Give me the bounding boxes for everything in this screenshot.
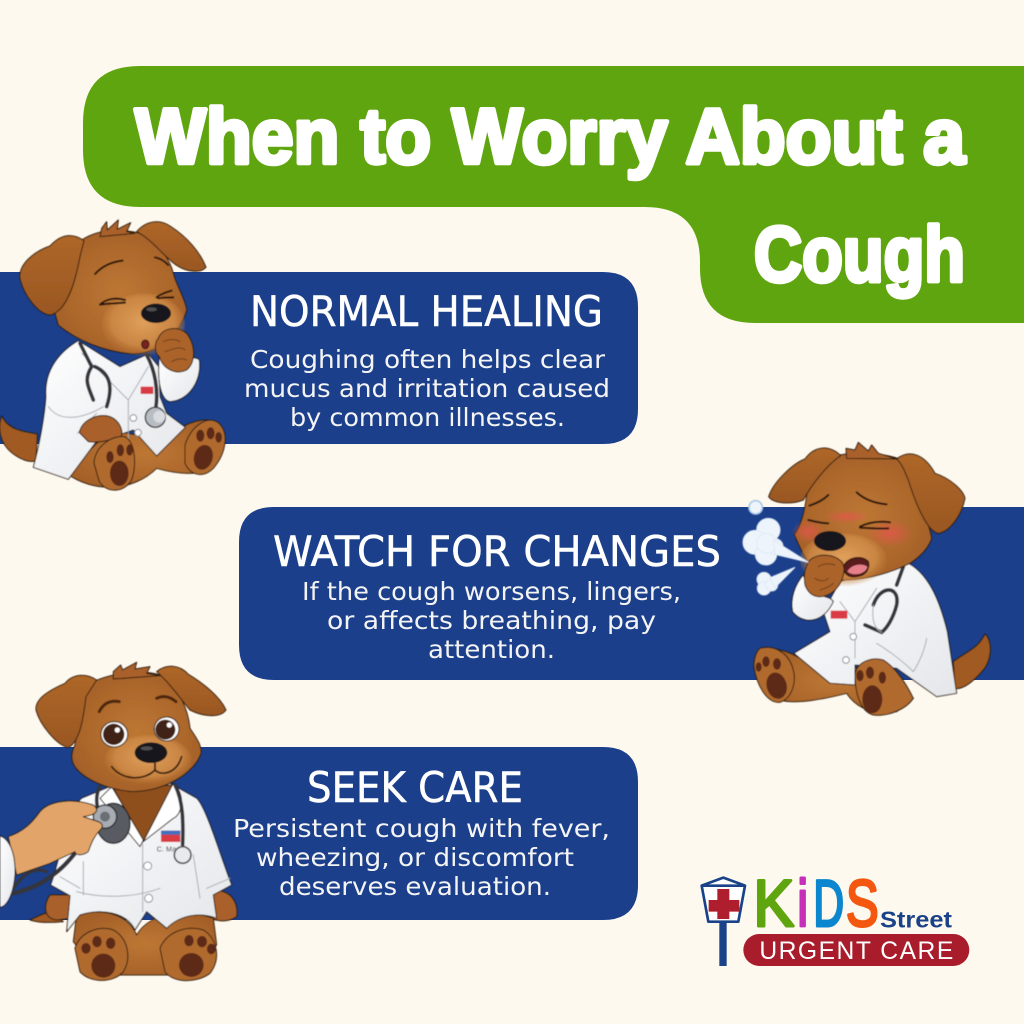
title banner <box>83 66 1024 323</box>
icon: cough puffs <box>743 501 808 595</box>
title text: When to Worry About a <box>135 92 966 180</box>
icon: lamp post with red cross <box>702 878 745 966</box>
text: seek care <box>233 814 610 901</box>
panel: watch for changes <box>239 507 1024 680</box>
wordmark: KiDS: K <box>753 866 794 940</box>
illustration: puppy coughing with red cheeks <box>743 442 990 715</box>
heading: watch for changes: WATCH FOR CHANGES <box>273 527 721 576</box>
wordmark: KiDS: i <box>797 866 808 940</box>
text: watch for changes: attention. <box>428 635 555 664</box>
title text <box>135 92 966 298</box>
wordmark: Street: Street <box>880 906 952 932</box>
illustration: puppy coughing into paw <box>0 220 225 490</box>
text: normal healing: by common illnesses. <box>290 403 565 432</box>
illustration: happy puppy with stethoscope and hand: C. Ma <box>157 845 177 854</box>
title text: Cough <box>754 210 965 298</box>
text: normal healing: mucus and irritation caused <box>244 374 610 403</box>
text: watch for changes: or affects breathing, pay <box>327 606 656 635</box>
text: seek care: wheezing, or discomfort <box>256 843 574 872</box>
illustration: happy puppy with stethoscope and hand <box>0 662 237 981</box>
panel: normal healing <box>0 272 638 444</box>
text: normal healing: Coughing often helps clear <box>250 345 606 374</box>
heading: normal healing: NORMAL HEALING <box>250 287 603 336</box>
text: normal healing <box>244 345 610 432</box>
text: watch for changes <box>302 577 681 664</box>
wordmark: KiDS: S <box>846 866 879 940</box>
badge: urgent care: URGENT CARE <box>759 938 953 965</box>
text: seek care: Persistent cough with fever, <box>233 814 610 843</box>
text: watch for changes: If the cough worsens, lingers, <box>302 577 681 606</box>
wordmark: KiDS <box>753 866 879 940</box>
wordmark: KiDS: D <box>813 866 844 940</box>
panel: seek care <box>0 747 638 920</box>
heading: seek care: SEEK CARE <box>307 763 523 812</box>
text: seek care: deserves evaluation. <box>279 872 551 901</box>
logo: Kids Street Urgent Care <box>702 866 969 966</box>
